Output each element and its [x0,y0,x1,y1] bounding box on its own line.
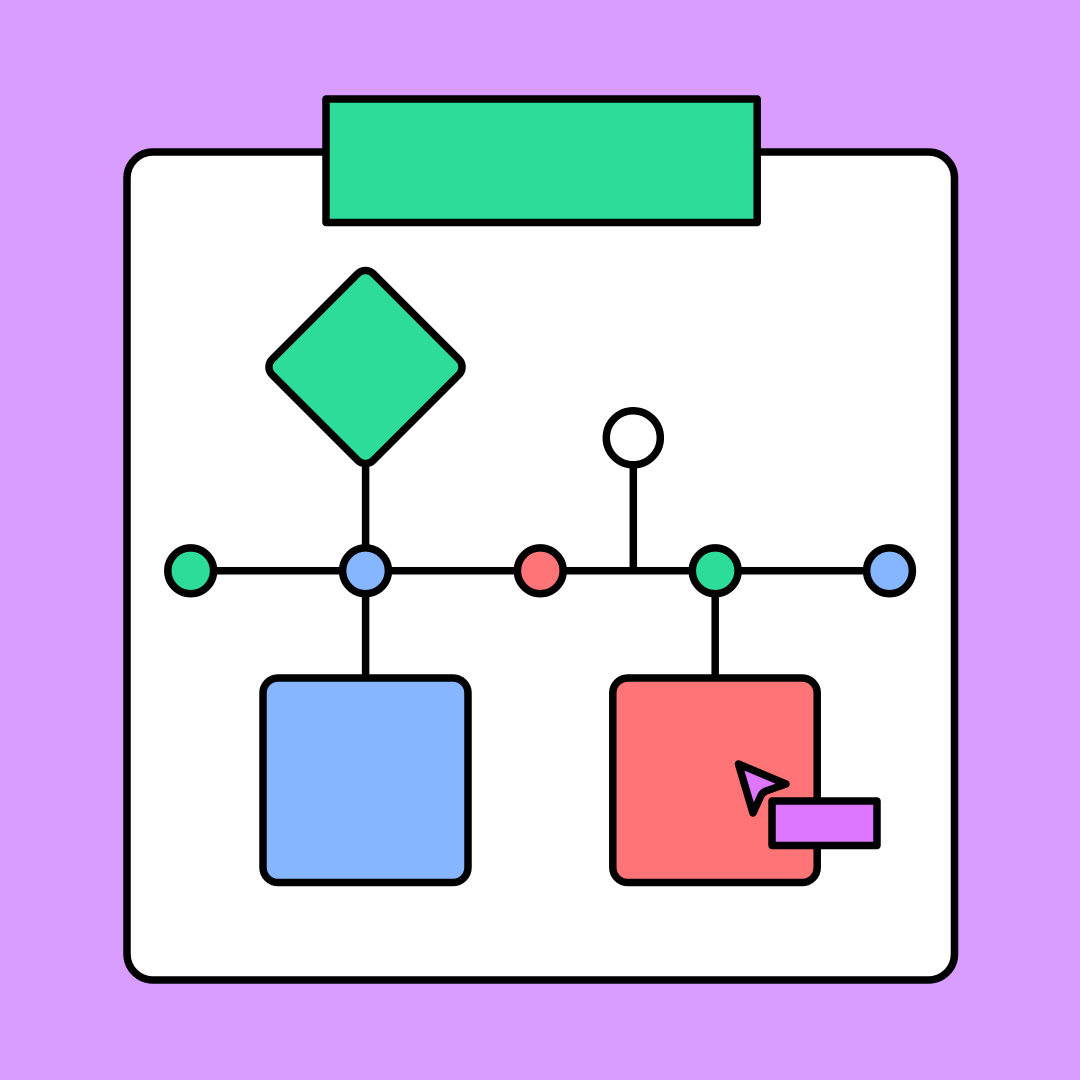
panel: red square [613,678,817,882]
panel: white board [127,152,954,980]
panel: purple label [772,801,877,846]
connector lines [191,460,889,680]
icon: blue timeline node [343,548,388,594]
icon: green timeline node [692,548,738,594]
icon: blue timeline node [867,548,912,594]
panel: blue square [263,678,468,882]
icon: green diamond [264,266,467,468]
icon: red timeline node [517,548,563,594]
icon: green timeline node [168,548,214,594]
panel: green header tab [326,99,757,222]
icon: white circle node [606,411,660,465]
icon: cursor arrow [738,764,786,813]
